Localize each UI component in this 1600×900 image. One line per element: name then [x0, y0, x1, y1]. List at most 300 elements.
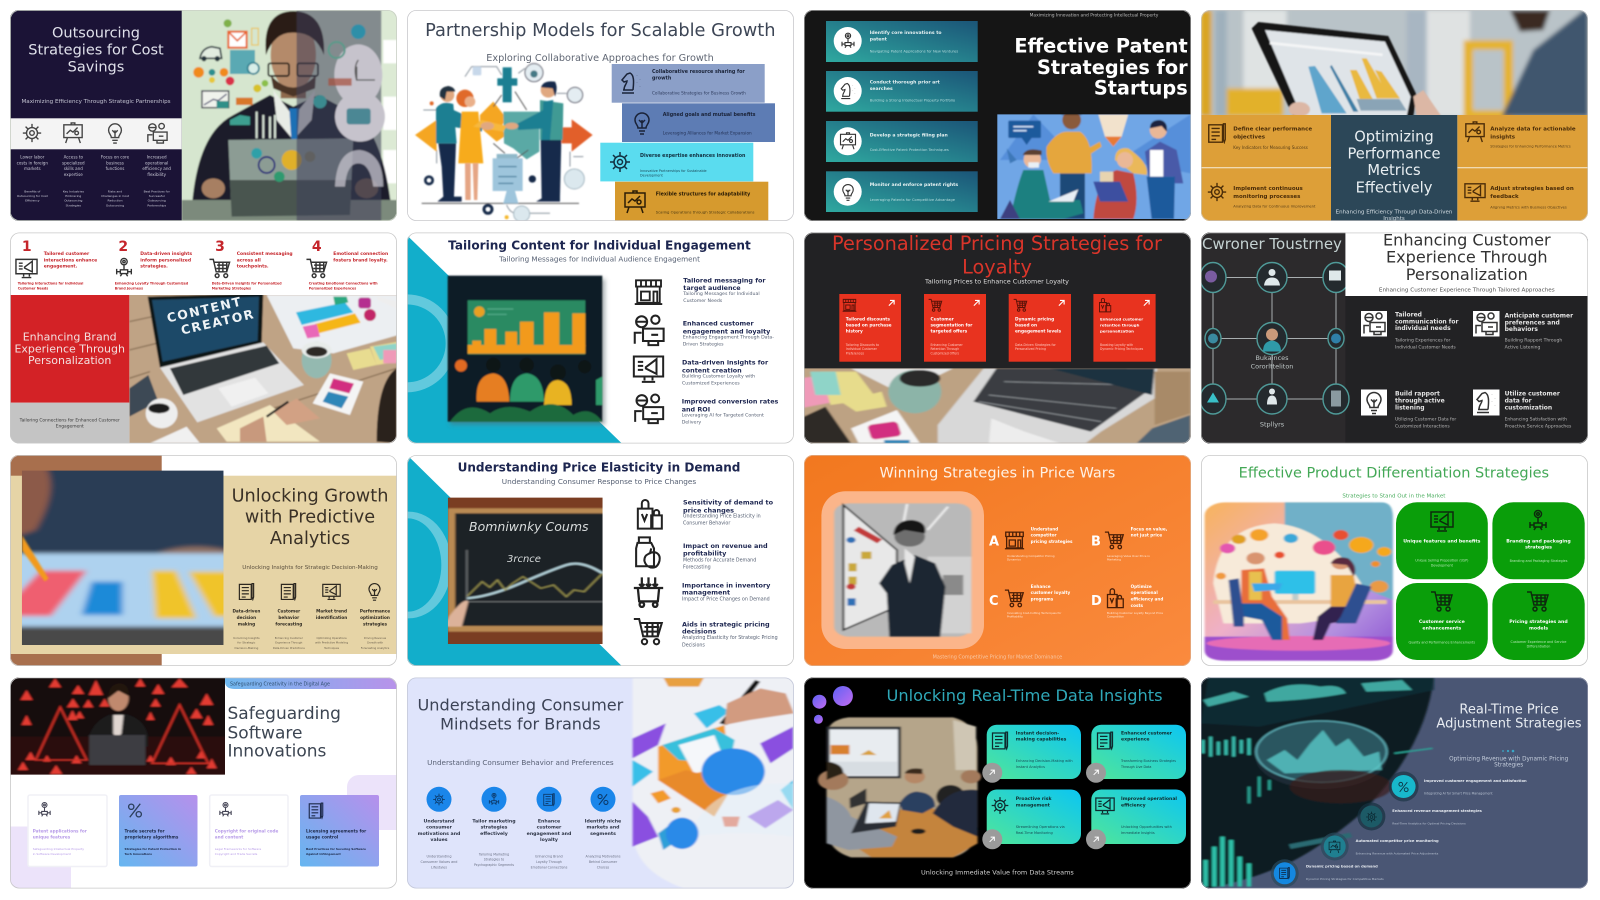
- slide 13: safeguarding software: [0, 670, 417, 900]
- strategy C: programs: [1031, 597, 1054, 602]
- tile 4: [1492, 583, 1585, 660]
- cell 1: Key Indicators for Measuring Success: [1233, 145, 1308, 150]
- column 4: Analyzing Motivations: [586, 854, 621, 858]
- slide 2: partnership models: [407, 10, 794, 222]
- top subtitle: Maximizing Innovation and Protecting Intellectual Property: [1030, 13, 1159, 19]
- title: Partnership Models for Scalable Growth: [425, 20, 776, 41]
- item 3: Utilizing Customer Data for: [1395, 416, 1456, 422]
- bar 3: [600, 143, 753, 181]
- step 3: [209, 239, 293, 290]
- item 2: Active Listening: [1505, 344, 1541, 350]
- strategy C: C: [989, 594, 999, 609]
- card 2: searches: [870, 86, 893, 92]
- tile 2: strategies: [1525, 545, 1552, 551]
- small dots: [1502, 750, 1514, 752]
- cell 2: Implement continuous: [1233, 186, 1304, 192]
- slide 5: brand experience: [10, 232, 403, 447]
- column 3: Reduction: [108, 199, 123, 203]
- strategy B: Focus on value,: [1131, 526, 1168, 531]
- lavender background blobs: [0, 775, 417, 900]
- photo: content creator laptop on desk: [127, 292, 403, 447]
- column 2: Tailoring Marketing: [478, 852, 509, 856]
- item 3: content creation: [682, 366, 742, 374]
- bar 1: [612, 64, 765, 103]
- card 3: [826, 121, 978, 162]
- right amber cells: [1457, 115, 1588, 221]
- slide 15: real-time data insights: [804, 678, 1191, 888]
- column 2: [62, 123, 85, 208]
- title: Metrics: [1367, 162, 1421, 179]
- title: Adjustment Strategies: [1436, 716, 1582, 731]
- tile 4: Pricing strategies and: [1509, 619, 1568, 625]
- title: Experience Through: [14, 343, 125, 356]
- strategy B: [1091, 526, 1168, 562]
- subtitle: Understanding Consumer Response to Price Changes: [502, 477, 696, 486]
- column 3: Challenges in Cost: [101, 194, 130, 198]
- cell 1: Define clear performance: [1233, 126, 1312, 132]
- column 2: Data-Driven Predictions: [273, 646, 305, 650]
- item 3: [634, 577, 771, 607]
- card 3: [982, 790, 1081, 849]
- column 4: Driving Revenue: [364, 636, 386, 640]
- card 2: [1086, 725, 1186, 783]
- column 3: Enhancing Brand: [535, 854, 563, 858]
- strategy D: Optimize: [1131, 584, 1152, 589]
- card 2: Through Live Data: [1120, 765, 1151, 769]
- cell 2: Analyzing Data for Continuous Improvement: [1233, 204, 1316, 208]
- slide 8: customer experience personalization: [1200, 231, 1588, 444]
- cell 3: insights: [1490, 134, 1516, 140]
- bar 2: Aligned goals and mutual benefits: [663, 112, 756, 118]
- subtitle: Tailoring Prices to Enhance Customer Loyalty: [924, 277, 1069, 285]
- item 1: Individual Customer Needs: [1395, 344, 1456, 350]
- card 3: Proactive risk: [1016, 796, 1052, 802]
- card 1: Safeguarding Intellectual Property: [33, 847, 84, 851]
- slide 9: predictive analytics: [10, 455, 397, 666]
- item 3: listening: [1395, 404, 1425, 411]
- strategy C: customer loyalty: [1031, 590, 1070, 595]
- card 1: Enhancing Decision-Making with: [1016, 759, 1073, 763]
- item 3: Automated competitor price monitoring: [1356, 839, 1439, 843]
- item 1: Tailored messaging for: [683, 276, 766, 284]
- column 4: flexibility: [147, 172, 167, 177]
- item 4: Dynamic Pricing Strategies for Competitive Markets: [1306, 877, 1384, 881]
- strategy B: Marketing: [1107, 558, 1121, 562]
- item 1: Customer Needs: [683, 298, 723, 304]
- column 4: Identify niche: [585, 818, 621, 824]
- column 4: Growth with: [367, 640, 383, 644]
- center title panel: [1331, 115, 1457, 221]
- item 1: [638, 499, 774, 529]
- subtitle: Understanding Consumer Behavior and Preferences: [427, 758, 614, 767]
- column 2: Outsourcing: [64, 199, 82, 203]
- item 3: [634, 356, 769, 387]
- footer: Unlocking Immediate Value from Data Streams: [921, 868, 1074, 876]
- column 1: motivations and: [418, 831, 460, 837]
- bar 1: Collaborative Strategies for Business Growth: [652, 91, 746, 96]
- strategy D: costs: [1131, 603, 1143, 608]
- item 2: preferences and: [1505, 319, 1560, 326]
- illustration: two people at a desk: [1205, 502, 1393, 661]
- title: Strategies for: [1037, 56, 1188, 79]
- item 1: communication for: [1395, 318, 1459, 325]
- column 1: Understand: [424, 818, 454, 824]
- strategy D: [1091, 584, 1163, 618]
- column 4: [360, 584, 390, 650]
- item 4: Delivery: [682, 420, 701, 426]
- item 4: Analyzing Elasticity for Strategic Pricing: [682, 635, 778, 641]
- photo: glass lens over market data: [1193, 673, 1434, 892]
- caption: Engagement: [56, 423, 84, 429]
- illustration: partners shaking hands: [415, 64, 593, 222]
- card 1: Individual Customer: [846, 347, 878, 351]
- item 4: Aids in strategic pricing: [682, 620, 770, 628]
- bar 2: Leveraging Alliances for Market Expansion: [663, 130, 752, 135]
- item 3: Building Customer Loyalty with: [682, 374, 755, 380]
- title: Effective Patent: [1014, 35, 1188, 58]
- card 4: retention through: [1100, 322, 1140, 327]
- item 2: profitability: [683, 550, 727, 558]
- card 1: [982, 725, 1081, 783]
- slide 12: product differentiation: [1201, 455, 1588, 666]
- column 1: markets: [24, 166, 41, 171]
- strategy D: operational: [1131, 590, 1158, 595]
- bar 3: Development: [640, 174, 663, 178]
- title: Strategies for Cost: [28, 43, 164, 59]
- decorative purple circles: [812, 686, 853, 724]
- step 3: Consistent messaging: [237, 251, 293, 257]
- item 3: Customized Interactions: [1395, 423, 1450, 429]
- item 2: Methods for Accurate Demand: [683, 557, 756, 563]
- title: Winning Strategies in Price Wars: [880, 466, 1115, 482]
- item 1: Sensitivity of demand to: [683, 499, 774, 507]
- step 2: 2: [118, 239, 128, 255]
- title: Loyalty: [962, 255, 1032, 278]
- card 4: Licensing agreements for: [306, 828, 367, 833]
- photo caption: content creator: CREATOR: [179, 306, 256, 338]
- step 2: Enhancing Loyalty Through Customized: [115, 281, 189, 285]
- item 2: Enhancing Engagement Through Data-: [683, 334, 774, 340]
- card 4: Against Infringement: [306, 852, 341, 856]
- item 4: [1271, 859, 1384, 887]
- item 2: [1357, 802, 1483, 830]
- column 3: Outsourcing: [106, 204, 124, 208]
- strategy A: [989, 526, 1073, 562]
- column 4: [142, 123, 171, 208]
- caption: Tailoring Connections for Enhanced Customer: [19, 418, 120, 424]
- title: Personalization: [28, 354, 111, 367]
- card 3: Streamlining Operations via: [1016, 825, 1065, 829]
- tile 3: [1396, 583, 1488, 660]
- illustration: audience watching chart: [448, 276, 605, 425]
- subtitle: Strategies to Stand Out in the Market: [1342, 493, 1446, 499]
- cell 4: feedback: [1490, 194, 1519, 200]
- card 4: Immediate Insights: [1121, 831, 1155, 835]
- card 4: [1093, 294, 1156, 362]
- card 2: segmentation for: [930, 322, 973, 328]
- column 1: making: [238, 621, 255, 626]
- column 1: consumer: [426, 825, 453, 831]
- strategy A: A: [989, 535, 999, 550]
- column 3: Loyalty Through: [536, 860, 562, 864]
- column 1: Understanding: [427, 854, 451, 858]
- column 3: functions: [106, 166, 124, 171]
- item 2: Anticipate customer: [1505, 312, 1573, 319]
- item 2: Driven Strategies: [683, 342, 724, 348]
- step 4: Creating Emotional Connections with: [309, 281, 378, 285]
- card 1: patent: [870, 37, 888, 43]
- step 1: Tailoring Interactions for Individual: [18, 281, 83, 285]
- teal corner shape: [370, 455, 622, 667]
- item 1: target audience: [683, 284, 741, 292]
- step 1: Tailored customer: [44, 251, 90, 257]
- tile 1: [1396, 502, 1488, 579]
- card 2: Enhanced customer: [1121, 730, 1173, 736]
- column 1: for Strategic: [237, 640, 256, 644]
- column 2: skills and: [64, 166, 83, 171]
- card 1: [28, 795, 107, 866]
- cell 4: [1465, 184, 1574, 210]
- photo: desk with laptop and mug: [800, 365, 1203, 448]
- slide 10: price elasticity: [370, 455, 794, 667]
- card 1: Patent applications for: [33, 828, 88, 833]
- column 2: Experience Through: [275, 640, 303, 644]
- column 4: markets and: [586, 825, 620, 831]
- chalk heading: Bomniwnky Coums: [469, 519, 589, 534]
- tile 4: Customer Experience and Service: [1511, 640, 1566, 644]
- title: Enhancing Brand: [23, 330, 117, 344]
- card 2: experience: [1121, 737, 1150, 743]
- card 2: Customized Offers: [930, 351, 959, 355]
- top gradient pill: [225, 678, 397, 689]
- chalk heading: [469, 519, 589, 565]
- column 3: [527, 787, 571, 870]
- card 1: Tailoring Discounts to: [845, 343, 879, 347]
- brown bands: [10, 455, 162, 666]
- card 2: proprietary algorithms: [124, 834, 179, 840]
- slide 4: performance metrics: [1200, 0, 1600, 222]
- strategy C: [989, 584, 1070, 618]
- card 4: Best Practices for Securing Software: [306, 847, 366, 851]
- column 4: segments: [590, 831, 616, 837]
- step 3: touchpoints.: [237, 264, 269, 270]
- column 3: customer: [537, 825, 562, 831]
- item 2: [636, 537, 768, 570]
- card 1: history: [846, 328, 863, 334]
- title: Tailoring Content for Individual Engagement: [448, 238, 751, 252]
- card 1: Preferences: [846, 351, 864, 355]
- slide 3: patent strategies: [804, 10, 1197, 222]
- column 1: [17, 124, 49, 203]
- card 4: efficiency: [1121, 802, 1146, 808]
- card 2: Building a Strong Intellectual Property Portfolio: [870, 99, 956, 103]
- strategy D: D: [1091, 594, 1102, 609]
- title: Understanding Price Elasticity in Demand: [458, 461, 740, 475]
- cell 2: monitoring processes: [1233, 194, 1301, 200]
- card 4: Unlocking Opportunities with: [1121, 825, 1172, 829]
- card 3: [210, 795, 288, 866]
- bar 1: growth: [652, 76, 672, 82]
- step 3: 3: [215, 239, 225, 255]
- step 2: inform personalized: [140, 258, 191, 264]
- item 2: behaviors: [1505, 326, 1538, 333]
- photo: chalkboard: [439, 493, 613, 648]
- column 3: [101, 124, 130, 208]
- step 2: strategies.: [140, 264, 168, 270]
- title: Effectively: [1356, 179, 1433, 196]
- column 4: [585, 787, 621, 870]
- column 3: identification: [316, 615, 347, 620]
- strategy A: competitor: [1031, 532, 1057, 537]
- bar 4: Scaling Operations through Strategic Collaborations: [656, 209, 755, 214]
- tile 2: [1492, 502, 1585, 579]
- card 3: based on: [1015, 322, 1037, 328]
- card 2: [119, 795, 198, 866]
- item 2: Impact on revenue and: [683, 542, 768, 550]
- item 1: Tailoring Experiences for: [1394, 337, 1450, 343]
- item 2: [635, 316, 774, 348]
- column 1: values: [430, 837, 448, 843]
- subtitle: Enhancing Customer Experience Through Tailored Approaches: [1379, 288, 1555, 294]
- column 4: Increased: [147, 154, 167, 160]
- cell 4: Aligning Metrics with Business Objectives: [1490, 206, 1567, 210]
- column 3: business: [106, 160, 124, 165]
- slide 1: outsourcing strategies: [10, 10, 401, 223]
- card 4: [826, 171, 978, 212]
- card 3: Copyright and Trade Secrets: [215, 852, 258, 856]
- card 3: and content: [215, 834, 243, 840]
- photo: pencil on bar chart: [10, 463, 235, 653]
- card 2: Transforming Business Strategies: [1120, 759, 1176, 763]
- subtitle: Tailoring Messages for Individual Audience Engagement: [498, 255, 700, 264]
- strategy D: Competition: [1107, 614, 1124, 618]
- step 1: Customer Needs: [18, 286, 48, 290]
- title: Personalization: [1406, 265, 1528, 284]
- slide 16: real-time price adjustment: [1193, 673, 1588, 892]
- column 3: Risks and: [108, 190, 122, 194]
- item 4: and ROI: [682, 405, 710, 413]
- column 1: [418, 787, 460, 870]
- tile 1: Unique Selling Proposition (USP): [1415, 558, 1468, 562]
- card 1: Instant decision-: [1016, 730, 1059, 736]
- strategy B: B: [1091, 535, 1101, 550]
- subtitle: Maximizing Efficiency Through Strategic Partnerships: [21, 99, 171, 105]
- item 3: management: [682, 589, 730, 597]
- footer: Mastering Competitive Pricing for Market Dominance: [933, 654, 1062, 660]
- white icon strip: [10, 118, 182, 149]
- tile 1: Unique features and benefits: [1403, 538, 1481, 544]
- card 4: Improved operational: [1121, 796, 1177, 802]
- strategy A: Understand: [1031, 526, 1058, 531]
- column 1: Lifestyles: [431, 866, 447, 870]
- card 2: Tech Innovations: [124, 852, 152, 856]
- item 3: Importance in inventory: [682, 581, 771, 589]
- card 1: Instant Analytics: [1016, 765, 1045, 769]
- item 3: [1361, 390, 1456, 429]
- item 1: [635, 276, 766, 304]
- tile 4: models: [1529, 625, 1548, 631]
- column 1: Unlocking Insights: [233, 636, 260, 640]
- title: Experience Through: [1386, 248, 1548, 267]
- column 2: effectively: [480, 831, 508, 837]
- step 4: [306, 239, 388, 290]
- column 1: decision: [237, 615, 256, 620]
- column 3: Techniques: [323, 646, 340, 650]
- strategy D: efficiency and: [1131, 597, 1163, 602]
- item 1: Improved customer engagement and satisfaction: [1424, 779, 1527, 783]
- column 3: [315, 584, 348, 650]
- item 1: Understanding Price Elasticity in: [683, 514, 761, 520]
- card 3: Dynamic pricing: [1015, 316, 1054, 322]
- card 3: Cost-Effective Patent Protection Techniques: [870, 148, 949, 152]
- item 4: Proactive Service Approaches: [1505, 423, 1572, 429]
- title: Real-Time Price: [1459, 702, 1559, 717]
- card 4: Enhanced customer: [1100, 316, 1143, 322]
- card 1: in Software Development: [33, 852, 72, 856]
- step 4: fosters brand loyalty.: [333, 258, 388, 264]
- card 2: Retention Through: [930, 347, 959, 351]
- item 4: [634, 619, 778, 648]
- strategy B: Leveraging Value Over Price in: [1107, 554, 1150, 558]
- item 4: data for: [1505, 397, 1532, 404]
- step 4: Emotional connection: [333, 251, 388, 257]
- item 1: [1361, 311, 1459, 350]
- photo: man at laptop with red alerts: [0, 670, 235, 780]
- column 2: strategies: [481, 825, 508, 831]
- cell 4: Adjust strategies based on: [1490, 186, 1574, 192]
- column 2: Enhancing Customer: [275, 636, 304, 640]
- step 2: Data-driven insights: [140, 251, 192, 257]
- title: Performance: [1347, 146, 1441, 162]
- card 2: [826, 71, 978, 112]
- column 2: Psychographic Segments: [474, 863, 514, 867]
- column 2: specialized: [62, 160, 85, 165]
- item 1: Consumer Behavior: [683, 521, 730, 527]
- column 2: Access to: [64, 154, 84, 160]
- column 4: Forecasting Analytics: [361, 646, 390, 650]
- tile 2: Branding and packaging: [1506, 538, 1571, 544]
- item 2: [1473, 311, 1573, 350]
- column 3: engagement and: [527, 831, 571, 837]
- slide 6: tailoring content: [363, 232, 794, 444]
- item 4: customization: [1505, 404, 1552, 411]
- item 1: Tailoring Messages for Individual: [682, 291, 760, 297]
- title: Outsourcing: [52, 26, 140, 42]
- title: Safeguarding: [228, 704, 341, 724]
- item 1: Tailored: [1395, 311, 1422, 318]
- step 3: Data-Driven Insights for Personalized: [212, 281, 282, 285]
- cell 3: Analyze data for actionable: [1490, 126, 1576, 132]
- item 4: Leveraging AI for Targeted Content: [682, 413, 764, 419]
- cell 1: [1209, 124, 1312, 150]
- title: Analytics: [270, 529, 350, 549]
- photo: tablet with bar charts in factory: [1201, 10, 1588, 115]
- card 3: Data-Driven Strategies for: [1015, 343, 1056, 347]
- column 4: Partnerships: [147, 204, 166, 208]
- item 4: decisions: [682, 628, 716, 636]
- item 2: Enhanced customer: [683, 320, 755, 328]
- customer journey diagram photo: Cororltteliton: [1251, 362, 1293, 370]
- tile 3: Customer service: [1419, 619, 1465, 625]
- column 1: Lower labor: [20, 154, 45, 160]
- column 2: forecasting: [275, 621, 302, 626]
- column 2: Key Industries: [63, 190, 84, 194]
- item 4: Utilize customer: [1505, 391, 1560, 398]
- card 1: [839, 294, 901, 362]
- beige panel: [10, 476, 397, 654]
- tile 3: enhancements: [1422, 625, 1461, 631]
- step 4: 4: [312, 239, 322, 255]
